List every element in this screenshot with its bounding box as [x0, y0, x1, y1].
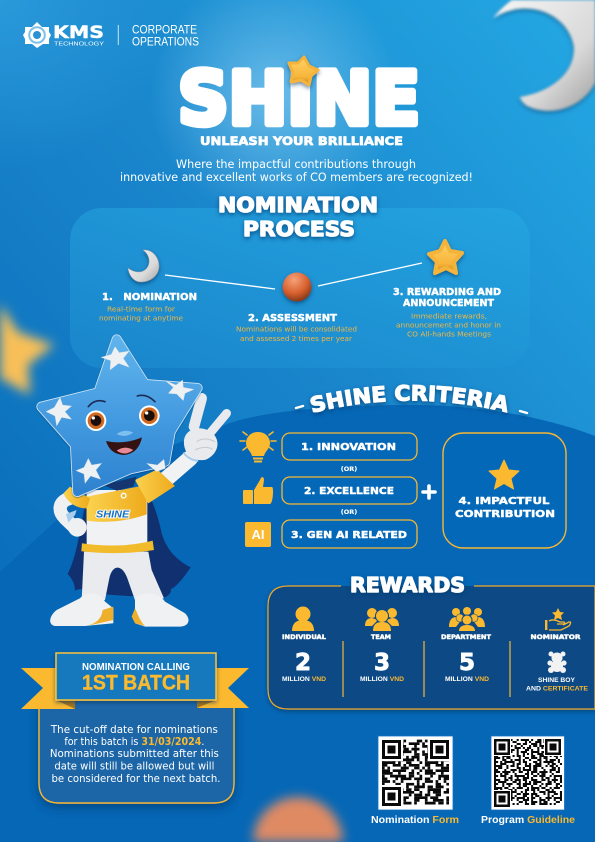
head — [41, 339, 198, 492]
step 1: Real-time form for — [107, 306, 175, 314]
criterion 4 box — [443, 433, 566, 548]
plus sign — [423, 486, 435, 498]
label: program guideline: Program Guideline — [481, 815, 576, 826]
step 3 — [393, 287, 501, 338]
step 3: announcement and honor in — [396, 322, 501, 330]
reward: individual — [282, 606, 327, 683]
or: (OR) — [341, 508, 357, 516]
panel: nomination calling — [21, 653, 249, 803]
step 2: Nominations will be consolidated — [236, 326, 357, 334]
mascot — [41, 339, 227, 627]
icon: person — [292, 606, 314, 631]
legs — [82, 552, 164, 605]
text panel: date will still be allowed but will — [54, 762, 214, 772]
reward: nominator: SHINE BOY — [538, 678, 575, 684]
shoes — [50, 593, 189, 627]
arms and hands — [60, 398, 227, 537]
step 1: nominating at anytime — [99, 314, 183, 322]
reward: team: TEAM — [371, 634, 391, 641]
text panel: for this batch is 31/03/2024. — [64, 737, 206, 748]
step 3: ANNOUNCEMENT — [403, 298, 495, 309]
reward: individual: 2 — [295, 650, 311, 676]
technology label: TECHNOLOGY — [54, 42, 104, 48]
icon: KMS emblem — [23, 22, 51, 48]
step 3: CO All-hands Meetings — [407, 330, 491, 338]
icon: small moon — [128, 250, 159, 282]
reward: individual: INDIVIDUAL — [282, 634, 326, 641]
corporate operations: OPERATIONS — [132, 36, 199, 48]
step 2: 2. ASSESSMENT — [248, 313, 338, 324]
reward: nominator — [526, 608, 588, 692]
icon: light bulb — [240, 432, 276, 462]
reward: nominator: AND CERTIFICATE — [526, 686, 582, 692]
panel: nomination process — [70, 193, 530, 368]
heading: nomination process: NOMINATION — [218, 193, 378, 217]
decorative large moon — [493, 0, 595, 110]
heading: nomination process — [218, 193, 378, 241]
reward: nominator: NOMINATOR — [530, 634, 581, 641]
step 2: and assessed 2 times per year — [240, 335, 352, 343]
shirt label: SHINE — [96, 510, 130, 521]
reward: individual: MILLION VND — [282, 677, 327, 683]
icon: gold star on title — [289, 57, 318, 85]
reward: team: 3 — [374, 650, 390, 676]
text panel: be considered for the next batch. — [52, 774, 220, 785]
cape — [68, 493, 191, 598]
reward: department: MILLION VND — [445, 677, 490, 683]
QR code: nomination form — [378, 736, 453, 810]
reward: team: MILLION VND — [360, 677, 405, 683]
text panel — [39, 700, 234, 803]
panel: criteria list — [240, 432, 566, 548]
reward: department: 5 — [459, 650, 475, 676]
icon: orange ball — [282, 272, 312, 302]
step 2 — [236, 313, 357, 343]
connector lines — [165, 263, 422, 289]
icon: teddy bear — [547, 652, 567, 673]
star decorations — [46, 347, 194, 483]
icon: gold star — [429, 241, 462, 273]
criterion 2 — [282, 477, 417, 504]
ribbon: 1ST BATCH — [82, 670, 190, 694]
decorative blurred ball — [253, 797, 343, 842]
icon: hand with star — [545, 608, 571, 630]
shirt — [63, 469, 175, 553]
tagline: Where the impactful contributions through — [176, 157, 416, 171]
icon: AI square: AI — [252, 527, 264, 542]
heading: rewards: REWARDS — [350, 573, 465, 597]
QR code: program guideline — [491, 736, 564, 810]
icon: thumbs up — [243, 477, 273, 504]
step 3: Immediate rewards, — [411, 312, 487, 320]
decorative blurred star — [0, 304, 54, 395]
reward: department — [441, 607, 492, 683]
separators — [343, 641, 510, 697]
criterion 1 — [282, 433, 417, 460]
step 3: 3. REWARDING AND — [393, 287, 501, 298]
criterion 4 box: 4. IMPACTFUL — [458, 496, 550, 507]
reward: department: DEPARTMENT — [441, 634, 492, 641]
text panel: The cut-off date for nominations — [50, 725, 218, 736]
criterion 2: 2. EXCELLENCE — [304, 486, 394, 497]
text panel: Nominations submitted after this — [50, 749, 219, 760]
step 1 — [99, 292, 197, 322]
criterion 4 box: CONTRIBUTION — [455, 509, 555, 520]
subtitle: UNLEASH YOUR BRILLIANCE — [200, 134, 403, 148]
heading: shine criteria: SHINE CRITERIA — [308, 384, 510, 416]
reward: team — [360, 608, 405, 683]
step 1: 1. NOMINATION — [102, 292, 197, 303]
or: (OR) — [341, 465, 357, 473]
criterion 3: 3. GEN AI RELATED — [291, 530, 407, 541]
tagline: innovative and excellent works of CO members are recognized! — [120, 170, 473, 184]
ribbon — [21, 653, 249, 709]
icon: team — [365, 608, 399, 631]
heading: nomination process: PROCESS — [243, 217, 355, 241]
logo — [23, 22, 199, 48]
KMS wordmark: KMS — [53, 23, 104, 43]
panel: rewards — [268, 573, 595, 709]
criterion 3 — [282, 520, 417, 548]
label: nomination form: Nomination Form — [371, 815, 459, 826]
criterion 1: 1. INNOVATION — [301, 442, 396, 453]
corporate operations: CORPORATE — [132, 24, 197, 36]
icon: AI square — [245, 522, 271, 547]
icon: department — [449, 607, 485, 631]
face — [86, 395, 160, 455]
title: SHINE: SHINE — [178, 57, 420, 142]
ribbon text: NOMINATION CALLING — [82, 662, 190, 673]
